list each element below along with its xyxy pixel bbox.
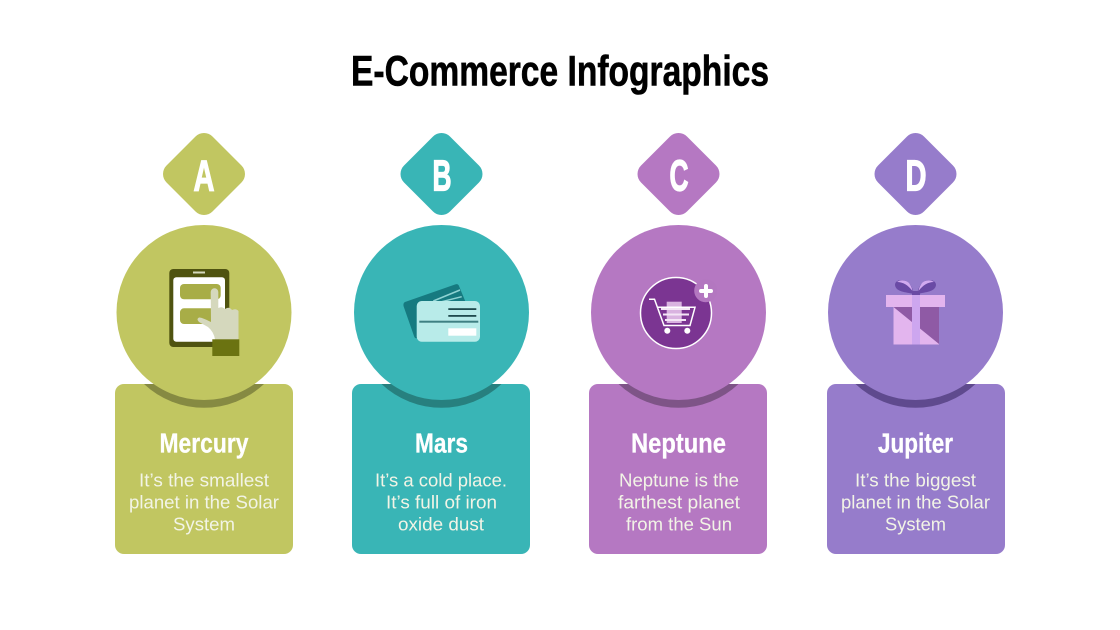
icon: credit cards bbox=[403, 284, 480, 342]
column: Mercury bbox=[115, 128, 293, 554]
heading: Jupiter: Jupiter bbox=[878, 428, 953, 458]
description: Jupiter bbox=[841, 470, 990, 534]
panel: Mercury bbox=[115, 384, 293, 554]
title: E-Commerce Infographics bbox=[351, 48, 769, 96]
column: Neptune bbox=[589, 128, 767, 554]
description: Neptune: from the Sun bbox=[626, 514, 732, 534]
description: Mercury: planet in the Solar bbox=[129, 492, 279, 512]
description: Neptune: farthest planet bbox=[618, 492, 740, 512]
icon: shopping cart bbox=[640, 278, 717, 348]
description: Mercury: System bbox=[173, 514, 235, 534]
diamond: A bbox=[158, 128, 250, 220]
column: Mars bbox=[352, 128, 530, 554]
description: Mars: It’s a cold place. bbox=[375, 470, 507, 490]
heading: Neptune: Neptune bbox=[631, 428, 726, 458]
diamond: B bbox=[396, 128, 487, 220]
description: Mercury bbox=[129, 470, 279, 534]
diamond: C: C bbox=[670, 152, 688, 200]
description: Jupiter: It’s the biggest bbox=[855, 470, 976, 490]
description: Neptune: Neptune is the bbox=[619, 470, 739, 490]
icon: gift box bbox=[886, 280, 945, 344]
shadow under circle bbox=[618, 384, 738, 408]
heading: Mars: Mars bbox=[415, 428, 468, 458]
column: Jupiter bbox=[827, 128, 1005, 554]
shadow under circle bbox=[856, 384, 976, 408]
icon: tablet with hand bbox=[169, 269, 239, 356]
description: Neptune bbox=[618, 470, 740, 534]
shadow under circle bbox=[382, 384, 502, 408]
circle bbox=[116, 225, 292, 400]
diamond: C bbox=[633, 128, 724, 220]
diamond: D bbox=[870, 128, 961, 220]
description: Mars: oxide dust bbox=[398, 514, 484, 534]
description: Jupiter: planet in the Solar bbox=[841, 492, 990, 512]
description: Mars: It’s full of iron bbox=[386, 492, 497, 512]
circle bbox=[354, 225, 529, 400]
diamond: B: B bbox=[432, 152, 452, 200]
circle bbox=[828, 225, 1003, 400]
panel: Jupiter bbox=[827, 384, 1005, 554]
shadow under circle bbox=[144, 384, 264, 408]
description: Jupiter: System bbox=[885, 514, 946, 534]
panel: Mars bbox=[352, 384, 530, 554]
diamond: A: A bbox=[194, 152, 214, 200]
description: Mars bbox=[375, 470, 507, 534]
diamond: D: D bbox=[906, 152, 926, 200]
description: Mercury: It’s the smallest bbox=[139, 470, 269, 490]
heading: Mercury: Mercury bbox=[160, 428, 249, 458]
panel: Neptune bbox=[589, 384, 767, 554]
circle bbox=[591, 225, 766, 400]
